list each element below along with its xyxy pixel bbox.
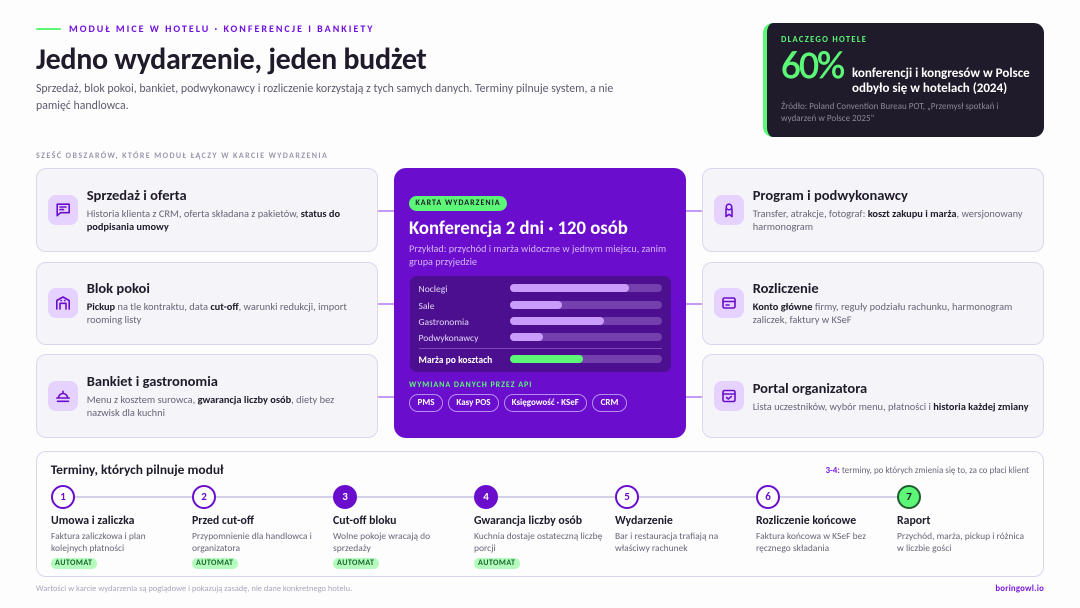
brand: boringowl.io (995, 584, 1044, 594)
stat label: DLACZEGO HOTELE (781, 34, 867, 44)
card: Blok pokoi (36, 262, 378, 345)
text: Kuchnia dostaje ostateczną liczbę (474, 530, 602, 542)
api chips (409, 394, 627, 412)
title: Jedno wydarzenie, jeden budżet (36, 41, 427, 78)
text: 2 (201, 490, 207, 503)
text: 7 (906, 490, 912, 503)
text: AUTOMAT (196, 558, 233, 568)
card: Rozliczenie (702, 262, 1044, 345)
stat text (852, 66, 1030, 96)
card text: podpisania umowy (87, 220, 169, 233)
text: 4 (483, 490, 489, 503)
card title: Program i podwykonawcy (753, 186, 908, 204)
text: Gwarancja liczby osób (474, 514, 582, 528)
card: Program i podwykonawcy (702, 168, 1044, 252)
timeline heading: Terminy, których pilnuje moduł (51, 460, 224, 478)
card: Portal organizatora (702, 354, 1044, 438)
text: porcji (474, 542, 496, 554)
card text: nazwisk dla kuchni (87, 406, 165, 419)
text: Bar i restauracja trafiają na (615, 530, 718, 542)
text: organizatora (192, 542, 240, 554)
event title: Konferencja 2 dni · 120 osób (409, 216, 628, 240)
text: Rozliczenie końcowe (756, 514, 856, 528)
step 2 (192, 485, 312, 569)
text: Cut-off bloku (333, 514, 397, 528)
stat panel (763, 23, 1044, 137)
card text (752, 207, 1023, 233)
card text (87, 393, 334, 419)
stat text: konferencji i kongresów w Polsce (852, 66, 1030, 81)
text: CRM (601, 397, 618, 408)
icon: card (714, 288, 744, 318)
icon: building (48, 288, 78, 318)
text: Przed cut-off (192, 514, 254, 528)
text: PMS (418, 397, 434, 408)
bar chart (410, 276, 671, 372)
text: Umowa i zaliczka (51, 514, 134, 528)
text: Przypomnienie dla handlowca i (192, 530, 312, 542)
eyebrow: MODUŁ MICE W HOTELU · KONFERENCJE I BANKIETY (69, 22, 374, 35)
card title: Bankiet i gastronomia (87, 372, 218, 390)
text: Faktura zaliczkowa i plan (51, 530, 146, 542)
card text (753, 300, 1012, 326)
text: Raport (897, 514, 930, 528)
card text: Menu z kosztem surowca, gwarancja liczby osób, diety bez (87, 393, 334, 406)
bar: Gastronomia: Gastronomia (418, 316, 469, 328)
card text: Transfer, atrakcje, fotograf: koszt zakupu i marża, wersjonowany (753, 207, 1023, 220)
step 5 (615, 485, 718, 554)
bar: Podwykonawcy: Podwykonawcy (418, 332, 478, 344)
card text: harmonogram (753, 220, 813, 233)
api label: WYMIANA DANYCH PRZEZ API (409, 380, 532, 390)
icon: chat (48, 195, 78, 225)
text: AUTOMAT (337, 558, 374, 568)
stat source: wydarzeń w Polsce 2025” (781, 112, 874, 124)
event pill (409, 196, 507, 211)
text: AUTOMAT (478, 558, 515, 568)
timeline note: 3-4: terminy, po których zmienia się to, za co płaci klient (825, 464, 1029, 476)
icon: badge (714, 195, 744, 225)
card text: zaliczek, faktury w KSeF (753, 313, 852, 326)
step 1 (51, 485, 146, 569)
bar: Sale: Sale (418, 300, 434, 312)
timeline line (63, 496, 909, 498)
event text: Przykład: przychód i marża widoczne w jednym miejscu, zanim (409, 242, 666, 254)
text: AUTOMAT (55, 558, 92, 568)
subtitle: pamięć handlowca. (36, 99, 129, 113)
stat source (781, 100, 999, 124)
connectors (378, 210, 702, 398)
stat value: 60% (781, 42, 843, 89)
step 4 (474, 485, 602, 569)
card title: Rozliczenie (753, 279, 819, 297)
timeline panel (36, 451, 1044, 577)
card text: Konto główne firmy, reguły podziału rachunku, harmonogram (753, 300, 1012, 313)
text: 5 (624, 490, 630, 503)
text: Wydarzenie (615, 514, 673, 528)
text: Księgowość · KSeF (512, 397, 579, 408)
card text: Historia klienta z CRM, oferta składana z pakietów, status do (87, 207, 340, 220)
stat source: Źródło: Poland Convention Bureau POT, „Przemysł spotkań i (781, 100, 999, 112)
text: właściwy rachunek (615, 542, 688, 554)
card: Bankiet i gastronomia (36, 354, 378, 438)
card text: Lista uczestników, wybór menu, płatności i historia każdej zmiany (753, 400, 1028, 413)
step 7 (897, 485, 1024, 554)
central panel: event card (394, 168, 686, 438)
text: Przychód, marża, pickup i różnica (897, 530, 1024, 542)
text: 3 (342, 490, 348, 503)
event text (409, 242, 666, 268)
card: Sprzedaż i oferta (36, 168, 378, 252)
eyebrow accent line (36, 28, 61, 30)
text: Wolne pokoje wracają do (333, 530, 430, 542)
text: w liczbie gości (897, 542, 951, 554)
card text: rooming listy (87, 313, 141, 326)
card title: Portal organizatora (753, 379, 867, 397)
card title: Sprzedaż i oferta (87, 186, 187, 204)
text: ręcznego składania (756, 542, 829, 554)
card text: Pickup na tle kontraktu, data cut-off, warunki redukcji, import (87, 300, 347, 313)
subtitle (36, 82, 613, 113)
step 6 (756, 485, 866, 554)
text: Kasy POS (456, 397, 491, 408)
step 3 (333, 485, 430, 569)
text: 1 (60, 490, 66, 503)
text: kolejnych płatności (51, 542, 124, 554)
text: 6 (765, 490, 771, 503)
text: sprzedaży (333, 542, 371, 554)
event pill: KARTA WYDARZENIA (415, 198, 501, 208)
section label: SZEŚĆ OBSZARÓW, KTÓRE MODUŁ ŁĄCZY W KARCIE WYDARZENIA (36, 150, 328, 160)
event text: grupa przyjedzie (409, 255, 477, 268)
icon: cloche (48, 381, 78, 411)
bar: Noclegi: Noclegi (418, 282, 448, 294)
text: Faktura końcowa w KSeF bez (756, 530, 866, 542)
icon: portal (714, 381, 744, 411)
bar: Marża po kosztach: Marża po kosztach (418, 354, 492, 366)
card title: Blok pokoi (87, 279, 150, 297)
stat text: odbyło się w hotelach (2024) (852, 81, 1007, 96)
subtitle: Sprzedaż, blok pokoi, bankiet, podwykonawcy i rozliczenie korzystają z tych samych danych. Terminy pilnuje system, a nie (36, 82, 613, 96)
card text (87, 300, 347, 326)
card text (87, 207, 340, 233)
footnote: Wartości w karcie wydarzenia są poglądowe i pokazują zasadę, nie dane konkretnego hotelu. (36, 584, 352, 594)
